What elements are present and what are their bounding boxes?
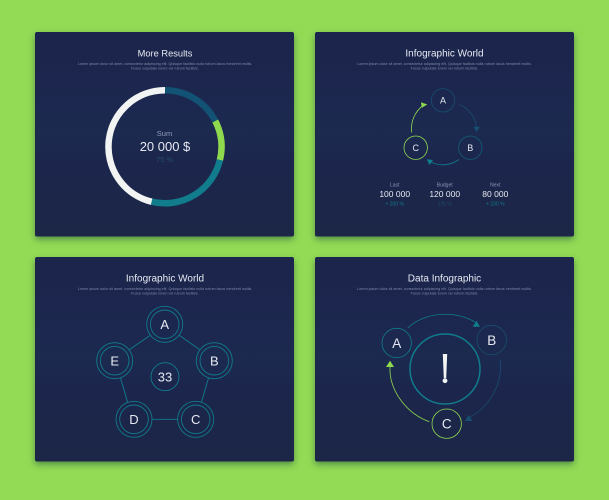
panel: infographic world pentagon bbox=[35, 257, 294, 462]
node B bbox=[196, 343, 232, 379]
stat: last bbox=[379, 182, 410, 207]
heading: infographic world: Infographic World bbox=[405, 48, 484, 60]
text block: lorem ipsum: Fusce vulputate lorem vel rutrum facilisis. bbox=[411, 292, 478, 296]
text block: lorem ipsum: Fusce vulputate lorem vel rutrum facilisis. bbox=[131, 292, 199, 296]
text block: lorem ipsum: Lorem ipsum dolor sit amet, consectetur adipiscing elit. Quisque facilisis nulla rutrum lacus hendrerit mollis. bbox=[357, 287, 532, 291]
text block: lorem ipsum: Fusce vulputate lorem vel rutrum facilisis. bbox=[411, 66, 478, 70]
text block: lorem ipsum: Lorem ipsum dolor sit amet, consectetur adipiscing elit. Quisque facilisis nulla rutrum lacus hendrerit mollis. bbox=[78, 62, 252, 66]
text block: lorem ipsum bbox=[357, 62, 532, 70]
node C: C bbox=[412, 143, 419, 153]
arrow: B to C bbox=[427, 159, 459, 165]
arrow: A to B bbox=[408, 314, 480, 328]
node C bbox=[432, 409, 461, 438]
exclamation mark bbox=[443, 354, 447, 383]
text block: lorem ipsum bbox=[357, 287, 532, 296]
node E bbox=[97, 343, 133, 379]
arrow: C to A bbox=[386, 361, 429, 422]
node A bbox=[382, 328, 411, 358]
center circle bbox=[410, 334, 480, 404]
arrow: C to A bbox=[411, 102, 427, 132]
text block: lorem ipsum bbox=[78, 62, 252, 70]
stat: last: Last bbox=[390, 182, 400, 188]
center value: 33 bbox=[158, 370, 172, 384]
node D: D bbox=[129, 412, 139, 427]
stat: next bbox=[482, 182, 509, 207]
panel: infographic world cycle bbox=[315, 32, 574, 236]
node B: B bbox=[467, 143, 473, 153]
stat: next: 80 000 bbox=[482, 189, 509, 199]
text block: lorem ipsum bbox=[78, 287, 252, 296]
heading: infographic world: Infographic World bbox=[126, 274, 204, 284]
node E: E bbox=[110, 353, 119, 368]
node C: C bbox=[191, 412, 200, 427]
donut percent: 75 % bbox=[156, 155, 173, 164]
text block: lorem ipsum: Lorem ipsum dolor sit amet, consectetur adipiscing elit. Quisque facilisis nulla rutrum lacus hendrerit mollis. bbox=[78, 287, 252, 291]
stat: last: 100 000 bbox=[379, 189, 410, 199]
node B: B bbox=[210, 353, 219, 368]
node A: A bbox=[392, 336, 401, 351]
node C bbox=[178, 401, 214, 437]
pentagon connectors bbox=[120, 336, 208, 419]
donut value: 20 000 $ bbox=[140, 139, 191, 154]
text block: lorem ipsum: Fusce vulputate lorem vel rutrum facilisis. bbox=[131, 66, 199, 70]
node B bbox=[459, 136, 482, 159]
panel: more results bbox=[35, 32, 294, 236]
stat: budget bbox=[429, 182, 460, 207]
node A: A bbox=[440, 96, 446, 106]
stat: budget: Budget bbox=[437, 182, 453, 188]
arrow: A to B bbox=[460, 104, 480, 132]
stat: last: + 200 % bbox=[385, 201, 404, 207]
node C: C bbox=[442, 417, 452, 432]
node A: A bbox=[160, 317, 169, 332]
node D bbox=[116, 401, 152, 437]
center value bbox=[151, 363, 179, 391]
stat: next: Next bbox=[490, 182, 501, 188]
node A bbox=[147, 306, 183, 342]
stat: budget: 120 000 bbox=[429, 189, 460, 199]
node B bbox=[477, 325, 506, 355]
stat: next: + 230 % bbox=[486, 201, 505, 207]
text block: lorem ipsum: Lorem ipsum dolor sit amet, consectetur adipiscing elit. Quisque facilisis nulla rutrum lacus hendrerit mollis. bbox=[357, 62, 532, 66]
node A bbox=[431, 89, 455, 112]
heading: data infographic: Data Infographic bbox=[408, 274, 481, 284]
arrow: B to C bbox=[465, 360, 500, 421]
node B: B bbox=[487, 333, 496, 348]
donut chart bbox=[108, 90, 221, 203]
node C bbox=[404, 136, 427, 159]
stat: budget: 125 % bbox=[438, 201, 452, 207]
donut label: sum: Sum bbox=[157, 129, 172, 138]
panel: data infographic bbox=[315, 257, 574, 462]
heading: more results: More Results bbox=[138, 48, 193, 58]
